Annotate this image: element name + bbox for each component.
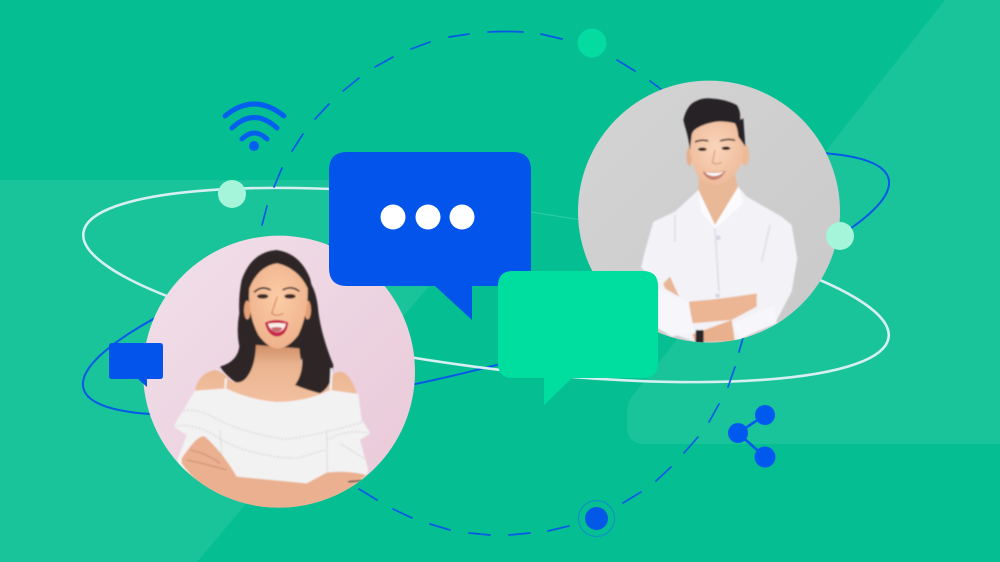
straps bbox=[225, 368, 332, 390]
large green chat bubble bbox=[498, 271, 658, 405]
node: left mint dot bbox=[218, 180, 246, 208]
crossed arms bbox=[182, 436, 367, 513]
large blue chat bubble with dots bbox=[329, 152, 531, 320]
background panel: left lighter shape bbox=[0, 180, 518, 562]
eyes and brows bbox=[698, 148, 707, 151]
shirt bbox=[641, 187, 797, 342]
neck bbox=[698, 172, 740, 225]
hair back bbox=[220, 250, 314, 387]
crossed arms bbox=[689, 293, 757, 323]
white orbit line bbox=[82, 186, 890, 384]
faint orbit segment bbox=[531, 212, 578, 220]
photo: woman in white blouse bbox=[143, 236, 415, 513]
head bbox=[741, 144, 749, 166]
node: right mint dot bbox=[826, 222, 854, 250]
dashed blue circular path bbox=[262, 32, 743, 535]
icon: share network bbox=[728, 405, 776, 468]
small blue chat bubble bbox=[109, 343, 163, 387]
photo: man in white shirt bbox=[578, 81, 840, 343]
eyes and brows bbox=[257, 294, 268, 299]
face bbox=[244, 301, 251, 319]
smile bbox=[703, 171, 726, 180]
hair right side bbox=[295, 280, 333, 393]
blouse bbox=[174, 388, 370, 485]
hair bbox=[683, 98, 745, 150]
icon: wifi bbox=[225, 104, 284, 151]
node: bottom blue target dot bbox=[578, 500, 614, 536]
background panel: right lighter shape bbox=[627, 0, 1000, 444]
mouth bbox=[265, 320, 288, 337]
blue orbit line bbox=[82, 152, 890, 415]
neck and chest bbox=[195, 345, 357, 407]
node: top green dot bbox=[578, 28, 606, 58]
watch bbox=[696, 330, 704, 343]
